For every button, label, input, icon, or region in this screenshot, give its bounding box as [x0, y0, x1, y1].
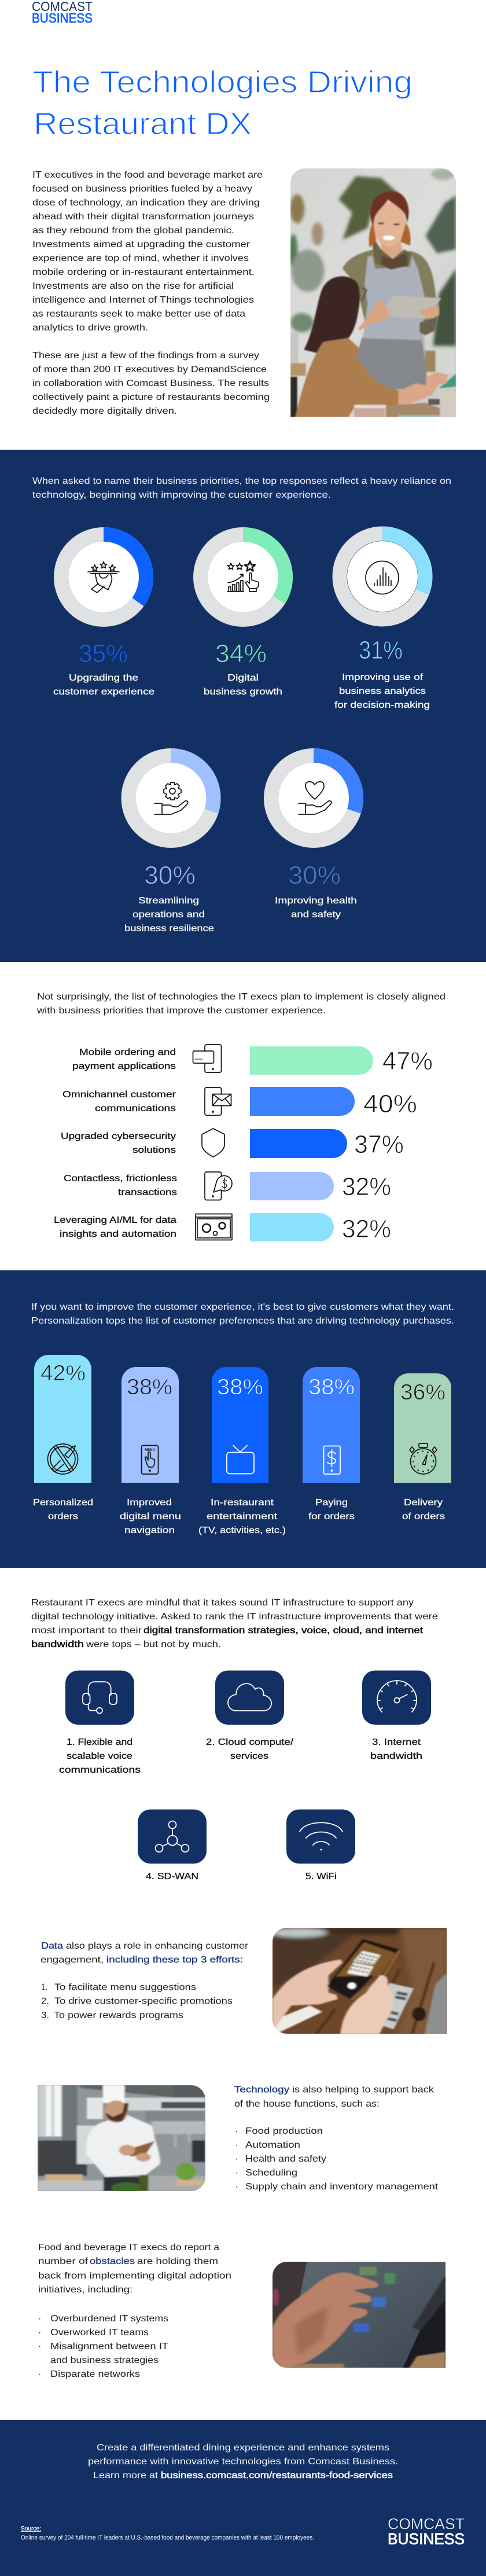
text block: data efforts: To drive customer-specific promotions	[54, 1997, 233, 2006]
section intro text: technology, beginning with improving the customer experience.	[32, 490, 331, 500]
stat: percentages: 30%	[144, 861, 196, 890]
tile: internet bandwidth	[362, 1670, 431, 1761]
text block: back of house functions: ·	[235, 2140, 238, 2150]
intro text block: as they rebound from the global pandemic.	[32, 226, 234, 236]
text block: back of house functions: of the house functions, such as:	[234, 2099, 380, 2109]
tile: flexible and scalable voice: communications	[59, 1765, 141, 1775]
text block: obstacles: Misalignment between IT	[50, 2342, 168, 2351]
donut captions: Streamlining	[138, 896, 199, 906]
text block: obstacles: Overworked IT teams	[50, 2328, 149, 2338]
bar: paying for orders 38%: for orders	[308, 1512, 355, 1522]
intro text block: decidedly more digitally driven.	[32, 406, 177, 416]
bar: personalized orders 42%: Personalized	[33, 1498, 93, 1508]
donut: 31% business analytics	[340, 534, 425, 619]
call to action text: Create a differentiated dining experience and enhance systems	[97, 2443, 389, 2453]
tile: internet bandwidth: bandwidth	[370, 1751, 422, 1761]
donut captions	[53, 673, 430, 934]
call to action text: performance with innovative technologies from Comcast Business.	[88, 2457, 398, 2467]
panel: business priorities	[0, 450, 486, 962]
text block: IT infrastructure: most important to their	[31, 1626, 142, 1636]
text block: data efforts: engagement,	[41, 1955, 104, 1965]
donut captions: business analytics	[339, 686, 426, 696]
tile: WiFi	[286, 1809, 355, 1882]
icon: speedometer	[377, 1681, 417, 1712]
row: omnichannel 40%: 40%	[363, 1090, 417, 1118]
logo: Comcast Business (footer): BUSINESS	[388, 2530, 465, 2548]
text block: back of house functions: Supply chain and inventory management	[245, 2182, 439, 2192]
text block: data efforts: To facilitate menu suggestions	[54, 1983, 196, 1992]
donut captions: for decision-making	[334, 700, 430, 710]
intro text block: dose of technology, an indication they are driving	[32, 198, 260, 208]
intro text block: experience are top of mind, whether it involves	[32, 253, 249, 263]
tile: internet bandwidth: 3. Internet	[372, 1737, 421, 1747]
row: cybersecurity 37%: solutions	[132, 1145, 176, 1155]
bar: digital menu 38%: Improved	[127, 1498, 172, 1508]
donut: 30% improving health and safety	[271, 756, 356, 840]
text block: obstacles: obstacles	[90, 2257, 135, 2266]
tile: flexible and scalable voice: scalable voice	[67, 1751, 132, 1761]
donut captions: Improving use of	[342, 673, 424, 682]
row: contactless 32%: transactions	[118, 1188, 177, 1197]
text block: obstacles: number of	[38, 2257, 89, 2266]
panel: customer preferences	[0, 1270, 486, 1568]
text block: obstacles: and business strategies	[50, 2355, 159, 2365]
icon: phone with menu: MENU	[145, 1449, 155, 1452]
text block: obstacles	[38, 2243, 231, 2379]
section intro text	[32, 476, 451, 500]
bar: digital menu 38%: 38%	[127, 1375, 172, 1399]
text block: obstacles: back from implementing digital adoption	[38, 2271, 231, 2281]
intro text block: Investments are also on the rise for artificial	[32, 281, 234, 291]
text block: IT infrastructure: digital transformation strategies, voice, cloud, and internet	[143, 1626, 424, 1636]
intro text block: focused on business priorities fueled by a heavy	[32, 184, 252, 194]
donut captions: customer experience	[53, 687, 154, 697]
icon: cloud	[228, 1684, 271, 1711]
intro text block: in collaboration with Comcast Business. The results	[32, 379, 269, 388]
stat: percentages: 35%	[79, 640, 128, 668]
photo: scanning QR code with phone	[271, 1928, 447, 2034]
text block: back of house functions	[234, 2085, 439, 2192]
text block: IT infrastructure: bandwidth	[31, 1640, 84, 1649]
stat: percentages: 30%	[288, 861, 341, 890]
row: omnichannel 40%: communications	[95, 1104, 176, 1114]
donut captions: Upgrading the	[69, 673, 138, 683]
text block: obstacles: ·	[38, 2369, 41, 2379]
text block: data efforts: 1.	[41, 1983, 47, 1992]
logo: Comcast Business (footer): COMCAST	[388, 2515, 465, 2533]
bar: delivery of orders 36%	[394, 1373, 451, 1522]
donut captions: Improving health	[275, 896, 357, 906]
tile: flexible and scalable voice: 1. Flexible and	[67, 1737, 132, 1747]
text block: obstacles: Disparate networks	[50, 2369, 140, 2379]
bar: digital menu 38%	[120, 1367, 181, 1535]
text block: IT infrastructure: digital technology initiative. Asked to rank the IT infrastructure improvements that were	[31, 1612, 438, 1622]
icon: phone with envelope	[205, 1087, 231, 1115]
intro text block: as restaurants seek to make better use of data	[32, 309, 245, 319]
call to action text: business.comcast.com/restaurants-food-services	[161, 2471, 393, 2481]
row: omnichannel 40%	[62, 1087, 417, 1118]
logo: Comcast Business (top)	[32, 0, 93, 25]
icon: network nodes	[155, 1821, 189, 1852]
donut captions: and safety	[291, 910, 341, 920]
icon: phone with card	[193, 1045, 221, 1072]
tile: cloud compute: 2. Cloud compute/	[206, 1737, 294, 1747]
row: cybersecurity 37%: Upgraded cybersecurity	[61, 1131, 176, 1141]
logo: Comcast Business (footer)	[388, 2515, 465, 2548]
row: AI/ML 32%: Leveraging AI/ML for data	[54, 1215, 176, 1225]
donut: 30% streamlining operations	[128, 756, 213, 840]
donut captions: operations and	[132, 910, 205, 920]
text block: obstacles: are holding them	[137, 2257, 218, 2266]
intro text block: intelligence and Internet of Things technologies	[32, 295, 254, 305]
text block: IT infrastructure	[31, 1598, 438, 1649]
text block: obstacles: ·	[38, 2314, 41, 2324]
text block: obstacles: Overburdened IT systems	[50, 2314, 168, 2324]
text block: IT infrastructure: Restaurant IT execs are mindful that it takes sound IT infrastructure to support any	[31, 1598, 414, 1608]
row: mobile ordering 47%: Mobile ordering and	[79, 1048, 176, 1057]
title: The Technologies Driving	[32, 65, 413, 100]
bar: in-restaurant entertainment 38%	[198, 1367, 286, 1535]
donut captions: business growth	[204, 687, 282, 697]
text block: back of house functions: ·	[235, 2182, 238, 2192]
icon: wifi	[300, 1822, 343, 1850]
call to action text	[88, 2443, 398, 2481]
section intro text	[31, 1302, 454, 1326]
text block: back of house functions: Technology	[234, 2085, 289, 2095]
bar: personalized orders 42%: orders	[48, 1512, 78, 1522]
row: contactless 32%	[64, 1172, 391, 1201]
text block: back of house functions: ·	[235, 2126, 238, 2136]
stat: percentages: 34%	[215, 640, 267, 668]
row: AI/ML 32%	[54, 1213, 391, 1243]
icon: gear over hand	[154, 782, 188, 814]
text block: data efforts: 3.	[41, 2011, 49, 2020]
donut captions: business resilience	[124, 924, 214, 934]
section intro: technologies to implement	[36, 992, 446, 1016]
text block: back of house functions: Scheduling	[245, 2168, 297, 2178]
bar: digital menu 38%: digital menu	[120, 1512, 181, 1522]
intro text block: of more than 200 IT executives by DemandScience	[32, 365, 267, 374]
icon: hand with tray and stars	[88, 562, 119, 593]
icon: heart over hand	[299, 782, 332, 814]
bar: in-restaurant entertainment 38%: 38%	[217, 1375, 263, 1399]
row: mobile ordering 47%: 47%	[382, 1047, 433, 1075]
text block: data efforts: Data	[41, 1941, 63, 1951]
bar: digital menu 38%: navigation	[124, 1526, 175, 1535]
source note: Source:	[21, 2526, 41, 2533]
bar: paying for orders 38%	[303, 1367, 360, 1522]
row: AI/ML 32%: insights and automation	[60, 1229, 176, 1239]
intro text block: Investments aimed at upgrading the customer	[32, 240, 251, 249]
section intro text: If you want to improve the customer experience, it's best to give customers what they want.	[31, 1302, 454, 1312]
row: mobile ordering 47%: payment applications	[72, 1061, 176, 1071]
tile: cloud compute: services	[230, 1751, 268, 1761]
bar: paying for orders 38%: 38%	[308, 1375, 355, 1399]
row: contactless 32%: Contactless, frictionless	[64, 1174, 177, 1184]
icon: phone with dollar	[324, 1446, 340, 1474]
bar: in-restaurant entertainment 38%: entertainment	[207, 1512, 278, 1522]
panel: call to action footer	[0, 2420, 486, 2576]
photo: chef with tablet in kitchen	[38, 2085, 205, 2193]
section intro: technologies to implement: with business priorities that improve the customer experience.	[36, 1006, 326, 1016]
section intro text: Personalization tops the list of customer preferences that are driving technology purchases.	[31, 1316, 454, 1326]
tile: WiFi: 5. WiFi	[305, 1872, 337, 1882]
text block: data efforts: including these top 3 efforts:	[106, 1955, 243, 1965]
bar: delivery of orders 36%: 36%	[400, 1380, 446, 1405]
stat: percentages	[79, 636, 403, 890]
source note: Online survey of 204 full-time IT leaders at U.S.-based food and beverage companies with at least 100 employees.	[21, 2534, 314, 2541]
bar: paying for orders 38%: Paying	[315, 1498, 348, 1508]
text block: back of house functions: Automation	[245, 2140, 300, 2150]
text block: back of house functions: Food production	[245, 2126, 323, 2136]
icon: plate with fork and knife	[47, 1444, 78, 1474]
text block: back of house functions: Health and safety	[245, 2154, 326, 2164]
tile: cloud compute	[206, 1670, 294, 1761]
bar: delivery of orders 36%: Delivery	[404, 1498, 443, 1508]
text block: back of house functions: ·	[235, 2154, 238, 2164]
photo: waitress with tablet serving a customer	[289, 168, 456, 417]
intro text block: collectively paint a picture of restaurants becoming	[32, 392, 270, 402]
icon: phone with menu	[141, 1446, 159, 1474]
intro text block: ahead with their digital transformation journeys	[32, 212, 254, 222]
row: cybersecurity 37%: 37%	[354, 1130, 404, 1159]
photo: hand using touchscreen	[273, 2262, 446, 2368]
intro text block: These are just a few of the findings from a survey	[32, 351, 259, 361]
icon: stopwatch	[410, 1443, 437, 1474]
text block: obstacles: ·	[38, 2328, 41, 2338]
icon: browser window with gears	[196, 1214, 232, 1240]
row: contactless 32%: 32%	[342, 1173, 391, 1201]
text block: data efforts: also plays a role in enhancing customer	[66, 1941, 249, 1951]
row: cybersecurity 37%	[61, 1129, 404, 1159]
text block: back of house functions: is also helping to support back	[292, 2085, 435, 2095]
text block: obstacles: Food and beverage IT execs do report a	[38, 2243, 219, 2252]
text block: data efforts: To power rewards programs	[54, 2011, 183, 2020]
bar chart: technologies planned	[54, 1045, 433, 1243]
text block: data efforts: 2.	[41, 1997, 49, 2006]
icon: headset	[83, 1682, 117, 1714]
text block: IT infrastructure: were tops – but not by much.	[86, 1640, 221, 1649]
title: Restaurant DX	[34, 106, 252, 141]
bar: personalized orders 42%: 42%	[41, 1361, 86, 1386]
icon: shield	[202, 1129, 224, 1157]
section intro: technologies to implement: Not surprisingly, the list of technologies the IT execs plan to implement is closely aligned	[37, 992, 446, 1002]
intro text block	[32, 170, 270, 416]
bar: personalized orders 42%	[33, 1355, 93, 1522]
tile: flexible and scalable voice	[59, 1670, 141, 1775]
tile: SD-WAN	[138, 1809, 207, 1882]
bar: in-restaurant entertainment 38%: (TV, activities, etc.)	[198, 1526, 286, 1535]
donut: 34% digital business growth	[200, 535, 286, 619]
icon: analytics circle	[366, 561, 399, 594]
bar: in-restaurant entertainment 38%: In-restaurant	[211, 1498, 274, 1508]
donut captions: Digital	[227, 673, 259, 683]
icon: stars, growth chart and pointing hand	[227, 561, 259, 591]
logo: Comcast Business (top): BUSINESS	[32, 10, 93, 25]
row: AI/ML 32%: 32%	[342, 1215, 391, 1243]
donut: 35% upgrading the customer experience	[61, 535, 146, 619]
intro text block: mobile ordering or in-restaurant entertainment.	[32, 267, 255, 277]
bar: delivery of orders 36%: of orders	[402, 1512, 445, 1522]
intro text block: IT executives in the food and beverage market are	[32, 170, 263, 180]
stat: percentages: 31%	[359, 636, 403, 664]
row: omnichannel 40%: Omnichannel customer	[62, 1090, 176, 1100]
tile: SD-WAN: 4. SD-WAN	[146, 1872, 198, 1882]
title	[32, 65, 413, 141]
section intro text: When asked to name their business priorities, the top responses reflect a heavy reliance on	[32, 476, 451, 486]
icon: phone with dollar bubble	[205, 1172, 232, 1200]
source note	[21, 2526, 314, 2541]
call to action text: Learn more at	[93, 2471, 159, 2481]
row: mobile ordering 47%	[72, 1045, 433, 1075]
text block: obstacles: ·	[38, 2342, 41, 2351]
text block: obstacles: initiatives, including:	[38, 2285, 132, 2295]
icon: television	[227, 1446, 254, 1473]
intro text block: analytics to drive growth.	[32, 323, 148, 333]
text block: back of house functions: ·	[235, 2168, 238, 2178]
text block: data efforts	[41, 1941, 249, 2020]
